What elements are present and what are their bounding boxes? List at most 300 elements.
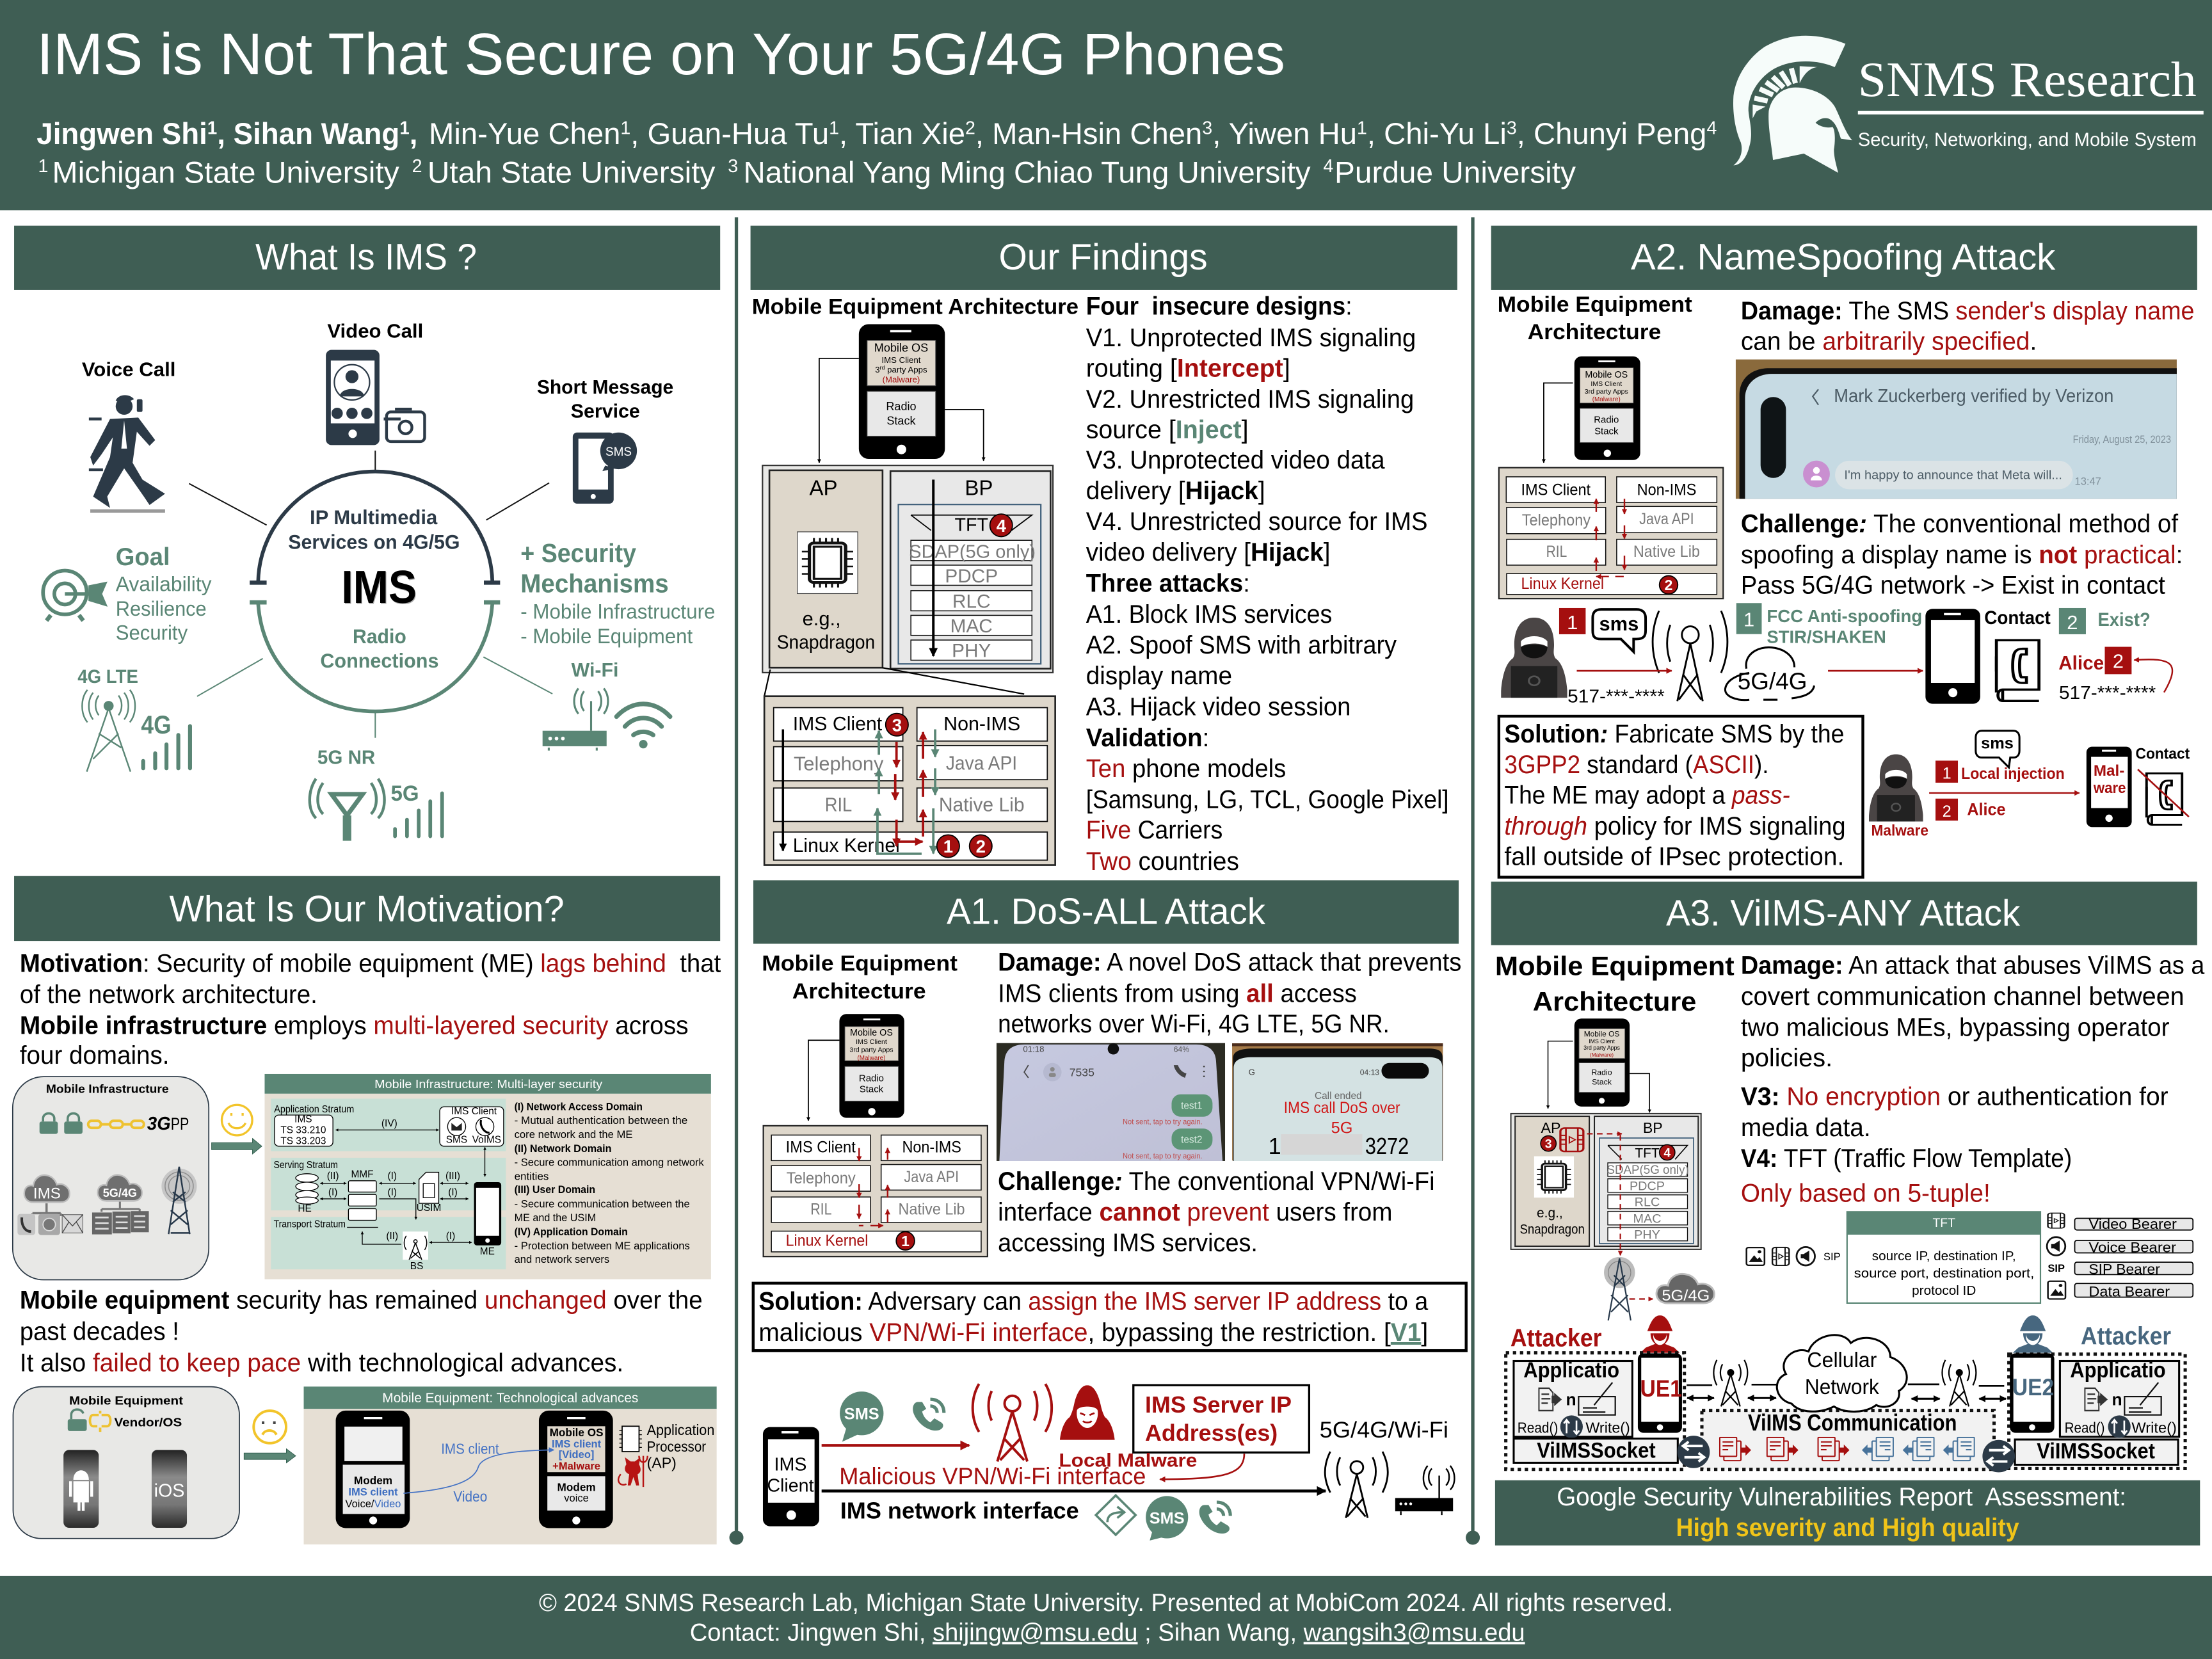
label: architecture: Mobile Equipment: [762, 951, 958, 975]
badge 1 green: [1736, 603, 1761, 634]
diagram: phone: [839, 1014, 904, 1118]
figure: multi-layer security: - Secure communication among network: [515, 1157, 705, 1169]
icon: router: [1395, 1466, 1454, 1515]
icon: 5G/4G cloud: 5G/4G: [1738, 668, 1807, 694]
text: damage and vulnerabilities: two malicious MEs, bypassing operator: [1741, 1014, 2169, 1042]
radio: 4G LTE: [77, 666, 190, 772]
icon: target: [43, 571, 104, 621]
badge 2 green: [2059, 608, 2086, 634]
diagram: phone: [859, 324, 945, 459]
authors: , Sihan Wang: [217, 117, 399, 151]
bearers: Voice Bearer: [2088, 1239, 2176, 1255]
heading bar: [751, 226, 1457, 290]
stack: left application: Write(): [1585, 1420, 1630, 1436]
IMS circle diagram: IP Multimedia: [310, 506, 438, 529]
icon: 5G/4G cloud: [1656, 1274, 1714, 1304]
badge 1 green: 1: [1743, 609, 1754, 631]
text: challenge: accessing IMS services.: [998, 1229, 1258, 1257]
card: mobile infrastructure: PP: [171, 1114, 189, 1134]
text: challenge: [998, 1167, 1435, 1257]
diagram: phone: 3rd party Apps: [1583, 1045, 1620, 1051]
diagram: AP and BP: PDCP: [945, 566, 998, 587]
heading bar: Our Findings: [998, 237, 1208, 278]
icon: crossed contact book: [2138, 769, 2189, 824]
icon: sms bubble: [1976, 731, 2019, 767]
authors: 1: [620, 118, 630, 138]
table: TFT: source IP, destination IP,: [1872, 1249, 2016, 1263]
diagram: AP and BP: TFT: [954, 515, 988, 536]
text: challenge: Challenge: The conventional VPN/Wi-Fi: [998, 1167, 1435, 1196]
icon: SMS bubble: [840, 1391, 883, 1442]
security mechanisms block: Mechanisms: [520, 569, 669, 598]
icon: phone call: [913, 1399, 944, 1431]
diagram: AP and BP: Snapdragon: [777, 630, 875, 653]
card: mobile equipment: Mobile Equipment: [69, 1394, 183, 1407]
icon: right swap circle: [1982, 1440, 2015, 1472]
text: challenge: interface cannot prevent users from: [998, 1198, 1392, 1226]
authors: 4: [1706, 118, 1717, 138]
icon: phone with IMS client: [763, 1427, 819, 1527]
table: TFT: TFT: [1932, 1216, 1955, 1230]
text: damage and vulnerabilities: covert communication channel between: [1741, 982, 2184, 1011]
icon: malware phone: ware: [2093, 780, 2126, 797]
diagram: software stack: Non-IMS: [902, 1139, 961, 1157]
screenshot: spoofed sender name: Mark Zuckerberg verified by Verizon: [1834, 386, 2113, 406]
text: insecure designs, attacks, validation: delivery [Hijack]: [1086, 477, 1265, 505]
text: insecure designs, attacks, validation: source [Inject]: [1086, 415, 1249, 444]
text: mobile equipment unchanged: It also failed to keep pace with technological advances.: [20, 1349, 623, 1377]
security mechanisms block: [520, 538, 715, 648]
figure: multi-layer security: - Mutual authentication between the: [515, 1115, 687, 1126]
diagram: phone: party Apps: [885, 365, 927, 374]
figure: technological advances: Mobile Equipment: Technological advances: [382, 1391, 638, 1406]
label: FCC anti-spoofing: STIR/SHAKEN: [1767, 627, 1886, 647]
figure: technological advances: Mobile OS: [550, 1426, 604, 1439]
label: 5G/4G/Wi-Fi: 5G/4G/Wi-Fi: [1320, 1418, 1448, 1443]
bearers: Data Bearer: [2088, 1283, 2170, 1299]
figure: multi-layer security: (IV): [381, 1118, 397, 1129]
badge 2 red: [2104, 647, 2131, 674]
text: damage and vulnerabilities: V4: TFT (Traffic Flow Template): [1741, 1144, 2072, 1173]
label: Alice: Alice: [2058, 652, 2104, 674]
IMS circle diagram: IMS: [341, 561, 417, 613]
text: challenge: [1741, 509, 2183, 599]
diagram: AP and BP: PHY: [952, 641, 991, 662]
text: mobile equipment unchanged: Mobile equipment security has remained unchanged over the: [20, 1286, 703, 1315]
banner: assessment: [1495, 1480, 2200, 1546]
diagram: AP and BP: 4: [997, 516, 1007, 536]
callout: solution: The ME may adopt a pass-: [1504, 781, 1790, 809]
card: mobile infrastructure: 3G: [147, 1114, 171, 1134]
card: mobile equipment: iOS: [154, 1481, 184, 1502]
screenshot: spoofed sender name: [1736, 360, 2177, 499]
box: IMS server IP: [1134, 1385, 1309, 1452]
text: insecure designs, attacks, validation: A2. Spoof SMS with arbitrary: [1086, 631, 1397, 659]
radio connector lines: [197, 657, 552, 738]
text: insecure designs, attacks, validation: video delivery [Hijack]: [1086, 538, 1330, 566]
figure: multi-layer security: and network servers: [515, 1254, 609, 1265]
figure: multi-layer security: Application Stratum: [274, 1104, 354, 1115]
arrow: network to phone: [1828, 670, 1923, 671]
authors: , Man-Hsin Chen: [975, 117, 1202, 151]
diagram: software stack: [1499, 468, 1723, 598]
affiliations: Michigan State University: [52, 156, 399, 189]
icon: sms bubble: sms: [1599, 613, 1639, 635]
diagram: software stack: Linux Kernel: [1521, 575, 1604, 593]
callout: solution: malicious VPN/Wi-Fi interface, bypassing the restriction. [V1]: [758, 1318, 1428, 1347]
label: phone number: 517-***-****: [1567, 687, 1665, 707]
diagram: AP software stack: Native Lib: [939, 793, 1025, 815]
figure: multi-layer security: Transport Stratum: [274, 1219, 346, 1230]
heading bar: [1491, 226, 2197, 290]
diagram: phone: Mobile OS: [874, 342, 928, 355]
radio: 5G NR: 5G NR: [317, 746, 375, 769]
figure: technological advances: Processor: [647, 1438, 706, 1455]
diagram: phone: 3rd party Apps: [849, 1046, 894, 1054]
diagram: AP software stack: 2: [976, 837, 986, 856]
figure: multi-layer security: Serving Stratum: [274, 1160, 338, 1171]
table: TFT: [1847, 1212, 2040, 1303]
diagram: software stack: [764, 1126, 988, 1256]
text: motivation intro: of the network architecture.: [20, 981, 317, 1009]
text: motivation intro: four domains.: [20, 1041, 169, 1070]
text: insecure designs, attacks, validation: A3. Hijack video session: [1086, 693, 1350, 721]
icon: 5G/4G cloud: 5G/4G: [1662, 1287, 1710, 1304]
dotted groupings: [1506, 1353, 2185, 1470]
stack: left application: Applicatio: [1523, 1358, 1619, 1382]
diagram: phone: Mobile OS: [1585, 370, 1628, 380]
authors: 3: [1202, 118, 1212, 138]
heading bar: [14, 226, 720, 290]
icon: UE1 phone: UE1: [1640, 1375, 1682, 1402]
badge 1 red: [1559, 608, 1585, 634]
label: architecture: Mobile Equipment Architecture: [752, 294, 1078, 319]
text: motivation intro: Motivation: Security of mobile equipment (ME) lags behind that: [20, 950, 721, 978]
card: mobile equipment: Vendor/OS: [115, 1415, 182, 1429]
lab tagline: Security, Networking, and Mobile System: [1858, 129, 2197, 150]
label: phone number: 517-***-****: [2059, 683, 2156, 703]
icon: malware phone: Mal-: [2094, 762, 2124, 780]
diagram: phone: Stack: [860, 1084, 884, 1095]
diagram: AP software stack: 3: [892, 715, 902, 735]
diagram: AP and BP: [1511, 1114, 1701, 1255]
diagram: phone: Mobile OS: [1584, 1029, 1619, 1038]
heading bar: [753, 880, 1459, 944]
icon: SMS phone: [573, 433, 637, 504]
screenshot: SMS failure: 01:18: [1023, 1045, 1044, 1054]
figure: technological advances: [304, 1386, 717, 1544]
stack: left application: Read(): [1518, 1420, 1558, 1436]
text: damage: networks over Wi-Fi, 4G LTE, 5G NR.: [998, 1010, 1390, 1038]
figure: multi-layer security: entities: [515, 1171, 549, 1182]
callout: solution: through policy for IMS signaling: [1504, 812, 1846, 840]
figure: multi-layer security: (III) User Domain: [515, 1184, 595, 1196]
label: attacker red: Attacker: [1511, 1325, 1602, 1352]
text: insecure designs, attacks, validation: [1086, 293, 1449, 876]
authors: , Chi-Yu Li: [1367, 117, 1507, 151]
box: IMS server IP: IMS Server IP: [1145, 1391, 1292, 1418]
screenshot: SMS failure: Not sent, tap to try again.: [1123, 1151, 1203, 1160]
icons: red and blue packets: [1720, 1438, 1975, 1461]
diagram: phone: IMS Client: [1591, 380, 1622, 388]
label: FCC anti-spoofing: [1767, 606, 1922, 647]
icon: SMS phone: SMS: [605, 445, 632, 459]
heading bar: What Is Our Motivation?: [169, 888, 565, 929]
figure: technological advances: Modem: [557, 1480, 596, 1493]
panel: What Is IMS: [14, 226, 720, 841]
figure: technological advances: Modem: [354, 1474, 392, 1487]
label: architecture: Architecture: [1533, 986, 1696, 1016]
figure: multi-layer security: - Protection between ME applications: [515, 1240, 690, 1252]
authors: , Yiwen Hu: [1212, 117, 1357, 151]
box: IMS server IP: Address(es): [1145, 1420, 1278, 1446]
diagram: AP and BP: 4: [1663, 1146, 1671, 1160]
screenshot: SMS failure: test2: [1181, 1135, 1202, 1146]
figure: multi-layer security: ME and the USIM: [515, 1212, 596, 1224]
diagram: malicious interface flow: [763, 1384, 1454, 1541]
diagram: TFT bearer mapping: [1747, 1212, 2193, 1303]
card: mobile infrastructure: Mobile Infrastructure: [46, 1082, 169, 1095]
diagram: software stack: Java API: [904, 1168, 959, 1186]
icon: malware phone: [2087, 747, 2132, 827]
figure: multi-layer security: (II): [386, 1231, 398, 1242]
figure: multi-layer security: MMF: [351, 1169, 374, 1180]
screenshot: SMS failure: 64%: [1174, 1045, 1189, 1054]
icon: UE2 phone: UE2: [2012, 1374, 2054, 1400]
icon: spartan helmet logo: [1733, 36, 1852, 173]
callout: solution: 3GPP2 standard (ASCII).: [1504, 751, 1768, 779]
authors: , Guan-Hua Tu: [630, 117, 829, 151]
column divider right: [1466, 217, 1480, 1544]
icon: 5G/4G cloud: [1725, 647, 1814, 700]
card: mobile infrastructure: [13, 1077, 209, 1280]
diagram: software stack: 2: [1665, 577, 1672, 593]
label: exist: Exist?: [2097, 609, 2151, 630]
label: attacker blue: Attacker: [2081, 1322, 2171, 1350]
screenshot: call DoS: G: [1249, 1068, 1255, 1077]
screenshot: SMS failure: 7535: [1070, 1066, 1094, 1079]
label: architecture: [1498, 293, 1692, 344]
text: insecure designs, attacks, validation: Ten phone models: [1086, 755, 1286, 783]
icon: red hacker: [1640, 1315, 1679, 1353]
text: damage: Damage: A novel DoS attack that prevents: [998, 948, 1461, 976]
security mechanisms block: - Mobile Infrastructure: [520, 600, 715, 623]
authors: Min-Yue Chen: [429, 117, 621, 151]
authors: , Tian Xie: [839, 117, 965, 151]
figure: technological advances: Video: [453, 1488, 487, 1505]
stack: right application: Read(): [2065, 1420, 2104, 1436]
figure: multi-layer security: USIM: [417, 1203, 441, 1214]
diagram: AP and BP: MAC: [1633, 1212, 1662, 1226]
figure: multi-layer security: (I): [446, 1231, 455, 1242]
panel: What Is Our Motivation: [13, 876, 721, 1544]
figure: multi-layer security: IMS Client: [451, 1106, 497, 1117]
callout: solution: Solution: Adversary can assign the IMS server IP address to a: [758, 1287, 1429, 1315]
figure: multi-layer security: HE: [298, 1203, 312, 1214]
diagram: phone: Radio: [886, 400, 917, 413]
radio: Wi-Fi: [543, 659, 670, 751]
text: insecure designs, attacks, validation: Five Carriers: [1086, 816, 1222, 844]
bearers: SIP: [2048, 1262, 2065, 1274]
diagram: software stack: Linux Kernel: [786, 1232, 868, 1250]
figure: technological advances: IMS client: [552, 1438, 602, 1450]
figure: multi-layer security: (II): [327, 1171, 339, 1182]
icon: left tower: [1713, 1360, 1747, 1406]
text: motivation intro: [20, 950, 721, 1070]
label: video call: Video Call: [327, 320, 423, 342]
panel: A3 ViIMS-ANY Attack: [1491, 882, 2205, 1546]
security mechanisms block: + Security: [520, 538, 636, 568]
diagram: AP and BP: AP: [809, 476, 838, 500]
figure: multi-layer security: (II) Network Domain: [515, 1143, 611, 1155]
IMS circle diagram: IMS: [342, 562, 417, 614]
heading bar: [14, 876, 720, 941]
badge 1 red: [1936, 760, 1958, 783]
text: insecure designs, attacks, validation: routing [Intercept]: [1086, 354, 1290, 382]
figure: multi-layer security: (I): [387, 1171, 397, 1182]
diagram: AP software stack: [764, 696, 1055, 865]
figure: multi-layer security: (I): [448, 1187, 458, 1198]
diagram: phone: IMS Client: [856, 1038, 887, 1046]
text: damage: IMS clients from using all access: [998, 979, 1357, 1007]
diagram: AP software stack: Linux Kernel: [793, 834, 900, 856]
IMS circle diagram: Connections: [320, 649, 438, 672]
text: challenge: Pass 5G/4G network -> Exist in contact: [1741, 571, 2165, 599]
diagram: AP and BP: 3: [1545, 1137, 1552, 1151]
screenshot: call DoS: 5G: [1331, 1119, 1352, 1137]
diagram: software stack: Native Lib: [1633, 543, 1700, 561]
diagram: AP software stack: Java API: [946, 751, 1017, 774]
arrow: [212, 1139, 262, 1154]
figure: multi-layer security: (I): [328, 1187, 337, 1198]
label: local malware: Local Malware: [1059, 1450, 1197, 1471]
stack: right application: Applicatio: [2070, 1358, 2166, 1382]
label: voice call: Voice Call: [82, 358, 175, 380]
figure: multi-layer security: (I): [387, 1187, 397, 1198]
text: insecure designs, attacks, validation: V4. Unrestricted source for IMS: [1086, 508, 1428, 536]
text: insecure designs, attacks, validation: V3. Unprotected video data: [1086, 446, 1385, 474]
text: damage: can be arbitrarily specified.: [1741, 328, 2037, 356]
text: insecure designs, attacks, validation: Two countries: [1086, 847, 1239, 876]
screenshot: spoofed sender name: I'm happy to announce that Meta will...: [1844, 469, 2062, 483]
icon: red hacker: [1060, 1385, 1115, 1440]
text: insecure designs, attacks, validation: Four insecure designs:: [1086, 293, 1352, 321]
label: local injection: Local injection: [1961, 765, 2065, 783]
panel: A2 NameSpoofing Attack: [1491, 226, 2197, 877]
diagram: AP and BP: RLC: [952, 591, 990, 613]
heading bar: A2. NameSpoofing Attack: [1631, 237, 2056, 278]
label: contact: Contact: [2136, 746, 2190, 763]
icon: forward diamond: [1096, 1495, 1135, 1535]
text: insecure designs, attacks, validation: [Samsung, LG, TCL, Google Pixel]: [1086, 786, 1449, 814]
diagram: phone: 3rd party Apps: [1585, 388, 1628, 396]
goal block: [116, 543, 212, 645]
icon: right tower: [1942, 1360, 1976, 1406]
diagram: phone: rd: [880, 364, 885, 371]
diagram: AP software stack: IMS Client: [793, 712, 883, 735]
icon: gray base station: [1604, 1257, 1635, 1320]
arrow: phone to stack: [808, 1040, 839, 1121]
affiliations: 3: [728, 156, 738, 177]
diagram: software stack: RIL: [1546, 543, 1567, 561]
text: insecure designs, attacks, validation: V2. Unrestricted IMS signaling: [1086, 385, 1414, 413]
icon: sad face: [253, 1411, 286, 1443]
stack: right application: ViIMSSocket: [2037, 1439, 2155, 1464]
icon: phone with IMS client: IMS: [774, 1455, 806, 1475]
diagram: AP and BP: [762, 465, 1053, 673]
label: FCC anti-spoofing: FCC Anti-spoofing: [1767, 606, 1922, 626]
figure: technological advances: voice: [564, 1492, 589, 1504]
badge 2 red: 2: [1943, 803, 1952, 821]
authors: Jingwen Shi: [36, 117, 214, 151]
callout: solution: [753, 1283, 1466, 1350]
label: malicious interface: Malicious VPN/Wi-Fi interface: [839, 1463, 1146, 1489]
diagram: phone: (Malware): [1592, 396, 1621, 403]
goal block: Resilience: [116, 597, 207, 620]
text: insecure designs, attacks, validation: Three attacks:: [1086, 570, 1250, 598]
diagram: phone: Radio: [1591, 1068, 1612, 1077]
radio: 4G LTE: 4G: [141, 711, 172, 739]
figure: technological advances: IMS client: [348, 1486, 398, 1498]
screenshot: spoofed sender name: Friday, August 25, 2023: [2073, 433, 2171, 445]
figure: technological advances: Voice/Video: [346, 1498, 401, 1510]
callout: solution: [1499, 716, 1863, 877]
goal block: Goal: [116, 543, 170, 571]
banner: assessment: High severity and High quality: [1676, 1514, 2019, 1542]
card: mobile equipment: [13, 1387, 239, 1539]
affiliations: 1: [38, 156, 48, 177]
icon: black tower: [1325, 1452, 1388, 1518]
icon: red tower: [973, 1384, 1052, 1461]
label: architecture: Architecture: [792, 979, 926, 1004]
IMS circle diagram: Services on 4G/5G: [288, 530, 460, 553]
diagram: AP and BP: SDAP(5G only): [1607, 1163, 1689, 1177]
figure: multi-layer security: (III): [445, 1171, 460, 1182]
figure: multi-layer security: BS: [410, 1261, 423, 1272]
IMS circle diagram: [250, 472, 500, 712]
icon: cellular network cloud: [1777, 1335, 1907, 1411]
affiliations: Purdue University: [1334, 156, 1576, 189]
footer band: Contact: Jingwen Shi, shijingw@msu.edu ; Sihan Wang, wangsih3@msu.edu: [690, 1619, 1525, 1646]
figure: multi-layer security: Mobile Infrastructure: Multi-layer security: [374, 1077, 603, 1091]
icon: SMS bubble green: [1146, 1496, 1188, 1541]
authors: 1: [207, 118, 217, 138]
diagram: software stack: Telephony: [787, 1169, 856, 1187]
figure: multi-layer security: VoIMS: [472, 1135, 501, 1146]
screenshot: call DoS: 04:13: [1360, 1068, 1379, 1077]
badge 2 green: 2: [2067, 611, 2078, 634]
heading bar: [1491, 882, 2197, 945]
text: mobile equipment unchanged: past decades !: [20, 1317, 179, 1345]
affiliations: National Yang Ming Chiao Tung University: [744, 156, 1311, 189]
diagram: software stack: Java API: [1639, 510, 1694, 528]
arrow: spoof to network: [1577, 670, 1672, 671]
arrows: phone to AP and BP: [1548, 1041, 1649, 1112]
diagram: AP and BP: PHY: [1634, 1228, 1660, 1242]
diagram: AP and BP: BP: [965, 476, 993, 500]
figure: multi-layer security: TS 33.203: [280, 1136, 326, 1147]
diagram: phone: (Malware): [857, 1055, 885, 1062]
arrow: IP assignment: [1160, 1454, 1244, 1479]
figure: multi-layer security: (I) Network Access Domain: [515, 1102, 643, 1113]
text: damage: [998, 948, 1461, 1038]
diagram: phone: Stack: [1594, 426, 1619, 437]
diagram: AP and BP: MAC: [950, 616, 993, 637]
screenshot: SMS failure: Not sent, tap to try again.: [1123, 1118, 1203, 1126]
icon: SMS bubble: SMS: [844, 1405, 879, 1423]
arrow: [1630, 1299, 1653, 1300]
icon: left swap circle: [1678, 1436, 1710, 1468]
